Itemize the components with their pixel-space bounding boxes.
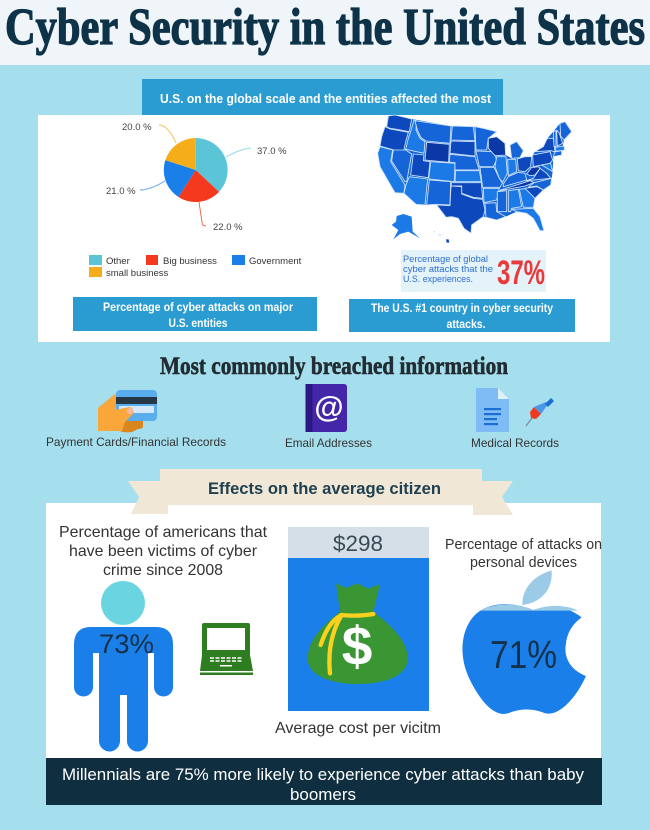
person figure 73 percent: [74, 581, 173, 752]
pie legend: [89, 255, 302, 279]
label: email addresses: Email Addresses: [285, 436, 372, 450]
caption: entities: U.S. entities: [168, 316, 228, 330]
pie legend: Big business: [163, 256, 217, 267]
caption: number one country: The U.S. #1 country in cyber security: [371, 301, 553, 315]
label: payment cards: Payment Cards/Financial Records: [46, 435, 226, 449]
pie chart: cyber attacks on entities: 20.0 %: [122, 122, 152, 133]
icon: email book: [306, 384, 347, 432]
pie chart: cyber attacks on entities: 37.0 %: [257, 146, 287, 157]
heading: most commonly breached information: Most commonly breached information: [160, 353, 508, 380]
icon: syringe: [526, 398, 554, 426]
personal devices text: personal devices: [470, 554, 577, 571]
personal devices text: Percentage of attacks on: [445, 536, 602, 553]
panel: effects on the average citizen: [46, 503, 602, 759]
callout: 37 percent: cyber attacks that the: [403, 264, 493, 275]
victims text: [59, 524, 268, 579]
icon: money bag: [308, 583, 408, 684]
person figure 73 percent: 73%: [99, 629, 154, 659]
caption: number one country: attacks.: [446, 317, 486, 331]
pie chart: cyber attacks on entities: 22.0 %: [213, 222, 243, 233]
title band: [0, 0, 650, 65]
icon: money bag: $: [342, 615, 372, 677]
victims text: have been victims of cyber: [69, 543, 258, 560]
footer bar: millennials statement: [46, 758, 602, 805]
icon: email book: @: [314, 391, 344, 424]
cost card with money bag: $298: [333, 531, 383, 556]
label: average cost: Average cost per vicitm: [275, 720, 441, 737]
icon: payment card in hand: [98, 390, 157, 432]
callout: 37 percent: [401, 250, 546, 292]
caption: entities: [73, 297, 317, 331]
victims text: Percentage of americans that: [59, 524, 268, 541]
callout: 37 percent: U.S. experiences.: [403, 274, 473, 285]
icon: medical document: [476, 388, 509, 432]
section header: global scale: [142, 79, 503, 116]
footer bar: millennials statement: Millennials are 75% more likely to experience cyber attacks than baby: [62, 766, 585, 784]
pie chart: cyber attacks on entities: 21.0 %: [106, 186, 136, 197]
callout: 37 percent: Percentage of global: [403, 254, 488, 265]
personal devices text: [445, 536, 602, 571]
pie legend: Other: [106, 256, 130, 267]
section header: global scale: U.S. on the global scale and the entities affected the most: [160, 91, 492, 106]
apple 71 percent: [462, 571, 586, 714]
victims text: crime since 2008: [103, 562, 223, 579]
cost card with money bag: [288, 527, 429, 711]
banner: effects on the average citizen: Effects on the average citizen: [208, 479, 441, 498]
panel: global scale and entities: [38, 115, 610, 342]
map of the United States: [378, 115, 572, 243]
icon: laptop: [200, 623, 253, 675]
caption: entities: Percentage of cyber attacks on major: [103, 300, 293, 314]
footer bar: millennials statement: boomers: [290, 786, 356, 804]
apple 71 percent: 71%: [490, 634, 557, 677]
pie legend: small business: [106, 268, 169, 279]
banner: effects on the average citizen: [128, 469, 513, 515]
callout: 37 percent: 37%: [497, 254, 545, 292]
caption: number one country: [349, 299, 575, 332]
pie legend: Government: [249, 256, 302, 267]
label: medical records: Medical Records: [471, 436, 559, 450]
pie chart: cyber attacks on entities: [106, 122, 287, 233]
